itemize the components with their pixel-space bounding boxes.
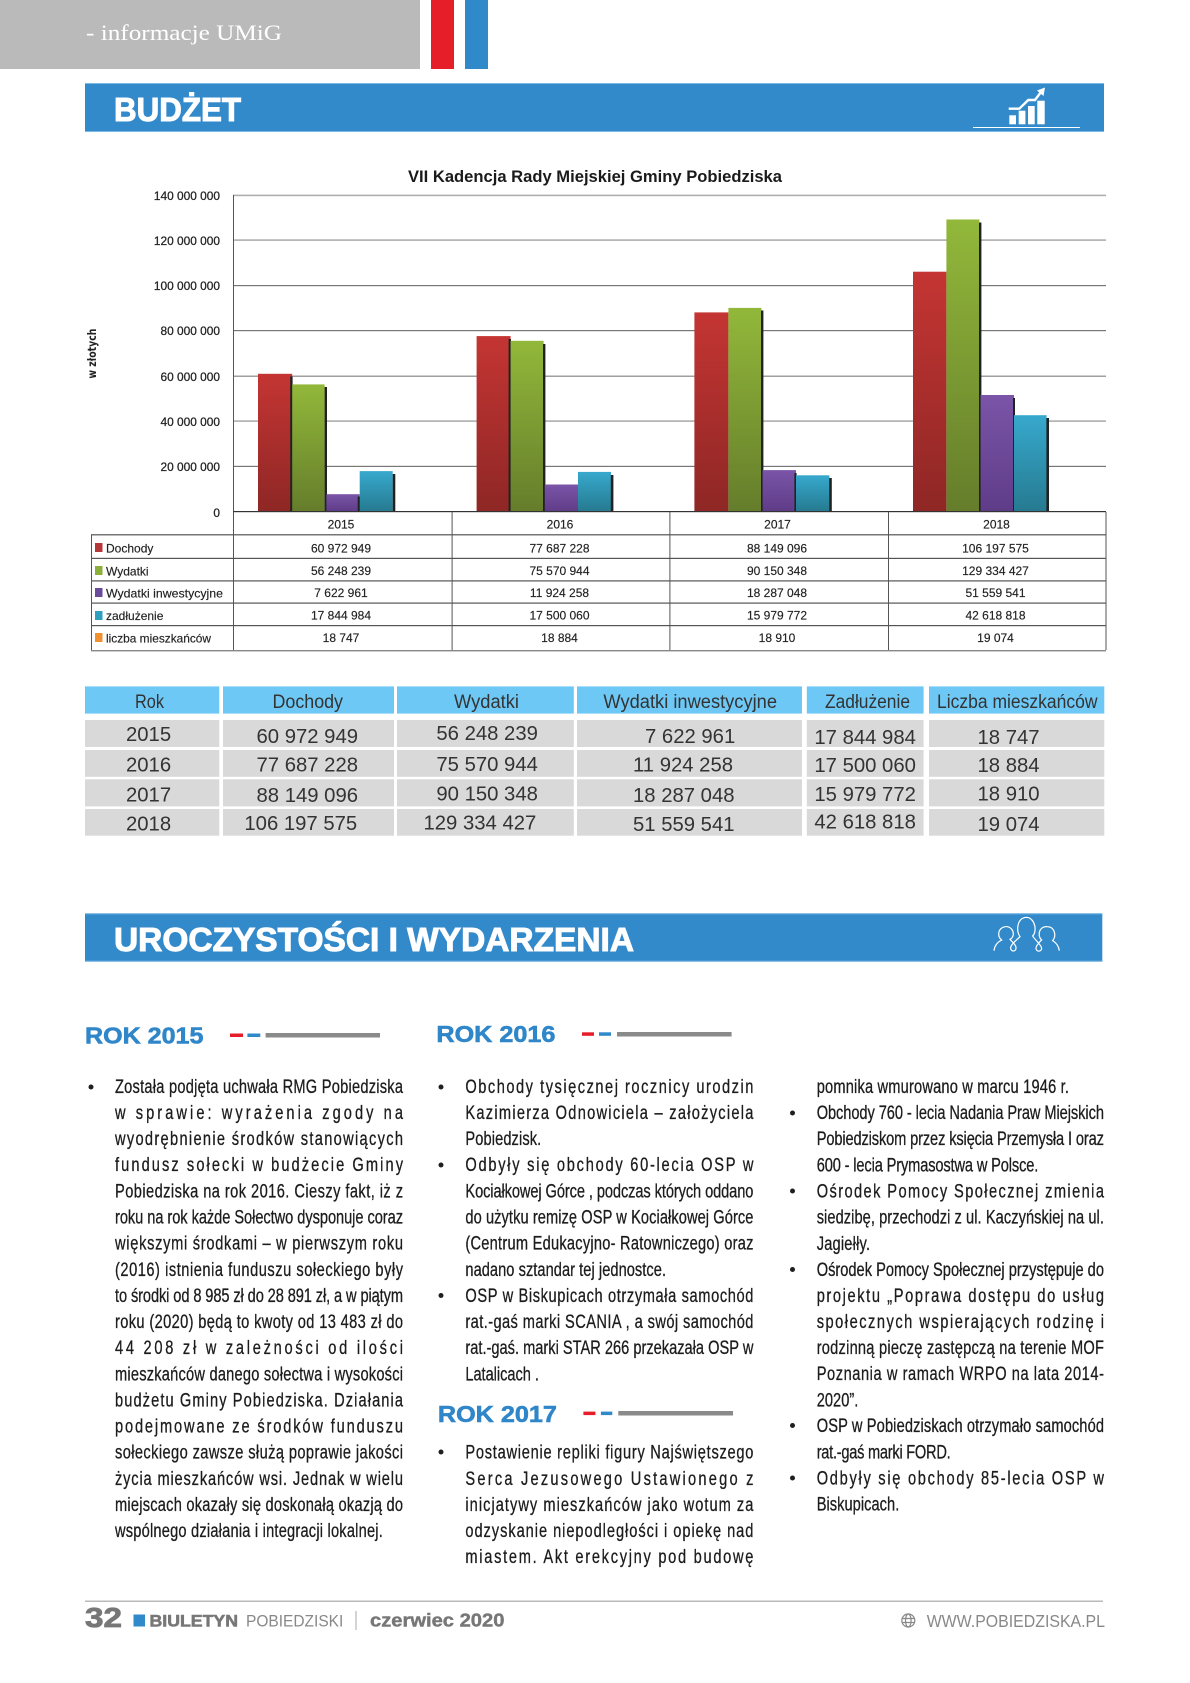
- footer: [85, 1601, 1105, 1633]
- summary table rows: 2015: [126, 724, 171, 746]
- text: rok 2016 bullets: rat.-gaś. marki STAR 266 przekazała OSP w: [465, 1336, 754, 1359]
- chart y-axis labels: 40 000 000: [160, 415, 220, 429]
- icon: rising bar chart: [973, 88, 1080, 128]
- table values: 77 687 228: [529, 542, 590, 556]
- text: rok 2015 bullets: wyodrębnienie środków stanowiących: [114, 1127, 403, 1150]
- heading: rok 2015: ROK 2015: [85, 1023, 203, 1049]
- summary table rows: 15 979 772: [814, 784, 916, 806]
- bar chart: budget 2015-2018: [233, 195, 1106, 512]
- summary table rows: 2016: [126, 754, 171, 776]
- summary table rows: 18 884: [978, 755, 1040, 777]
- table values: [311, 518, 1029, 645]
- text: rok 2016 bullets: Obchody tysięcznej rocznicy urodzin: [465, 1075, 753, 1098]
- page number: 32: [85, 1602, 122, 1633]
- text: rok 2016 bullets: Kazimierza Odnowiciela – założyciela: [465, 1101, 754, 1124]
- table values: 75 570 944: [529, 564, 590, 578]
- table values: 18 910: [759, 631, 796, 645]
- heading: rok 2017: [438, 1401, 733, 1427]
- text: rok 2016 bullets: [438, 1075, 754, 1385]
- website: WWW.POBIEDZISKA.PL: [927, 1611, 1105, 1631]
- chart data table: [91, 512, 1106, 651]
- text: rok 2016 bullets: rat.-gaś marki SCANIA , a swój samochód: [465, 1310, 753, 1333]
- text: rok 2015 bullets: podejmowane ze środków funduszu: [115, 1414, 403, 1437]
- summary table rows: 106 197 575: [244, 813, 357, 835]
- summary table header: Zadłużenie: [825, 692, 910, 713]
- text: rok 2015 bullets: roku na rok każde Sołectwo dysponuje coraz: [115, 1205, 403, 1228]
- text: rok 2017 bullets, column three: rodzinną pieczę zastępczą na terenie MOF: [817, 1336, 1104, 1359]
- table values: 129 334 427: [962, 564, 1029, 578]
- text: rok 2016 bullets: OSP w Biskupicach otrzymała samochód: [465, 1284, 753, 1307]
- text: rok 2017 bullets, column two: Serca Jezusowego Ustawionego z: [465, 1467, 753, 1490]
- text: rok 2017 bullets, column three: Obchody 760 - lecia Nadania Praw Miejskich: [817, 1101, 1104, 1124]
- text: rok 2017 bullets, column three: społecznych wspierających rodzinę i: [817, 1310, 1104, 1333]
- table values: 15 979 772: [747, 608, 807, 622]
- table values: 18 747: [323, 631, 360, 645]
- section banner: uroczystości: [85, 913, 1102, 962]
- chart y-axis labels: 80 000 000: [160, 324, 220, 338]
- summary table rows: 18 910: [978, 784, 1040, 806]
- summary table header: Wydatki inwestycyjne: [603, 692, 777, 713]
- chart y-axis labels: 20 000 000: [160, 460, 220, 474]
- summary table rows: 19 074: [978, 814, 1040, 836]
- summary table rows: 42 618 818: [814, 812, 916, 834]
- summary table header: Dochody: [272, 692, 343, 713]
- icon: globe: [902, 1614, 915, 1627]
- publication name: [134, 1610, 504, 1630]
- text: rok 2015 bullets: budżetu Gminy Pobiedziska. Działania: [115, 1388, 403, 1411]
- header strip: [0, 0, 488, 69]
- table values: 90 150 348: [747, 564, 807, 578]
- header strip: - informacje UMiG: [86, 20, 282, 45]
- table values: 60 972 949: [311, 542, 371, 556]
- text: rok 2016 bullets: Kociałkowej Górce , podczas których oddano: [465, 1179, 753, 1202]
- table values: 2016: [547, 518, 574, 532]
- text: rok 2017 bullets, column three: Ośrodek Pomocy Społecznej zmienia: [817, 1179, 1104, 1202]
- table values: 7 622 961: [314, 586, 368, 600]
- summary table rows: 88 149 096: [256, 785, 358, 807]
- chart title: VII Kadencja Rady Miejskiej Gminy Pobiedziska: [408, 167, 783, 186]
- text: rok 2017 bullets, column three: pomnika wmurowano w marcu 1946 r.: [817, 1075, 1069, 1098]
- table values: 42 618 818: [965, 608, 1026, 622]
- text: rok 2015 bullets: to środki od 8 985 zł do 28 891 zł, a w piątym: [115, 1284, 403, 1307]
- table values: 2017: [764, 518, 791, 532]
- table values: 88 149 096: [747, 542, 807, 556]
- summary table rows: 77 687 228: [256, 754, 358, 776]
- text: rok 2015 bullets: Została podjęta uchwała RMG Pobiedziska: [115, 1075, 403, 1098]
- text: rok 2015 bullets: Pobiedziska na rok 2016. Cieszy fakt, iż z: [115, 1179, 403, 1202]
- table values: 17 844 984: [311, 608, 371, 622]
- icon: group of people: [994, 917, 1059, 951]
- summary table rows: [85, 720, 1104, 836]
- text: rok 2015 bullets: miejscach okazały się doskonałą okazją do: [115, 1493, 403, 1516]
- section banner: uroczystości: UROCZYSTOŚCI I WYDARZENIA: [114, 921, 634, 958]
- summary table rows: 18 747: [978, 727, 1040, 749]
- table values: 2018: [983, 518, 1010, 532]
- table legend: zadłużenie: [106, 609, 164, 623]
- summary table rows: 17 500 060: [814, 755, 916, 777]
- table values: 11 924 258: [530, 586, 589, 600]
- text: rok 2015 bullets: 44 208 zł w zależności od ilości: [115, 1336, 403, 1359]
- text: rok 2017 bullets, column three: 2020”.: [817, 1388, 858, 1411]
- summary table rows: 129 334 427: [424, 812, 536, 834]
- text: rok 2017 bullets, column three: siedzibę, przechodzi z ul. Kaczyńskiej na ul.: [817, 1205, 1104, 1228]
- table values: 106 197 575: [962, 542, 1029, 556]
- summary table header: Liczba mieszkańców: [937, 692, 1098, 713]
- text: rok 2017 bullets, column two: Postawienie repliki figury Najświętszego: [465, 1440, 753, 1463]
- chart y-axis labels: 100 000 000: [154, 279, 220, 293]
- publication name: BIULETYN: [150, 1612, 238, 1630]
- chart y-axis labels: 0: [213, 506, 220, 520]
- text: rok 2015 bullets: większymi środkami – w pierwszym roku: [114, 1231, 403, 1254]
- text: rok 2016 bullets: Latalicach .: [465, 1362, 539, 1385]
- text: rok 2017 bullets, column three: 600 - lecia Prymasostwa w Polsce.: [817, 1153, 1038, 1176]
- text: rok 2017 bullets, column two: inicjatywy mieszkańców jako wotum za: [465, 1493, 754, 1516]
- bars 2018: [913, 220, 1049, 511]
- text: rok 2015 bullets: [88, 1075, 403, 1542]
- text: rok 2017 bullets, column three: [790, 1075, 1104, 1515]
- section banner: budżet: BUDŻET: [114, 91, 241, 128]
- summary table rows: 56 248 239: [436, 723, 538, 745]
- text: rok 2015 bullets: (2016) istnienia funduszu sołeckiego były: [115, 1258, 403, 1281]
- summary table rows: 90 150 348: [436, 784, 538, 806]
- text: rok 2017 bullets, column three: Poznania w ramach WRPO na lata 2014-: [817, 1362, 1104, 1385]
- summary table rows: 2018: [126, 814, 171, 836]
- text: rok 2016 bullets: do użytku remizę OSP w Kociałkowej Górce: [465, 1205, 753, 1228]
- heading: rok 2016: ROK 2016: [436, 1021, 555, 1047]
- text: rok 2015 bullets: w sprawie: wyrażenia zgody na: [114, 1101, 403, 1124]
- summary table rows: 2017: [126, 784, 171, 806]
- text: rok 2015 bullets: życia mieszkańców wsi. Jednak w wielu: [115, 1467, 403, 1490]
- table legend: Dochody: [106, 542, 153, 556]
- text: rok 2015 bullets: wspólnego działania i integracji lokalnej.: [114, 1519, 383, 1542]
- text: rok 2016 bullets: Odbyły się obchody 60-lecia OSP w: [465, 1153, 754, 1176]
- table values: 2015: [328, 518, 355, 532]
- text: rok 2015 bullets: roku (2020) będą to kwoty od 13 483 zł do: [115, 1310, 403, 1333]
- text: rok 2017 bullets, column three: projektu „Poprawa dostępu do usług: [817, 1284, 1104, 1307]
- text: rok 2017 bullets, column three: rat.-gaś marki FORD.: [817, 1440, 951, 1463]
- table values: 19 074: [977, 631, 1014, 645]
- axis title: w złotych: [85, 329, 99, 379]
- text: rok 2017 bullets, column two: odzyskanie niepodległości i opiekę nad: [465, 1519, 753, 1542]
- summary table rows: 17 844 984: [814, 727, 916, 749]
- text: rok 2015 bullets: sołeckiego zawsze służą poprawie jakości: [115, 1440, 403, 1463]
- chart y-axis labels: 120 000 000: [154, 234, 220, 248]
- summary table rows: 51 559 541: [633, 814, 735, 836]
- table values: 56 248 239: [311, 564, 371, 578]
- summary table rows: 75 570 944: [436, 754, 538, 776]
- summary table rows: 7 622 961: [645, 726, 735, 748]
- text: rok 2017 bullets, column two: miastem. Akt erekcyjny pod budowę: [465, 1545, 753, 1568]
- table legend: Wydatki inwestycyjne: [106, 586, 223, 600]
- summary table rows: 18 287 048: [633, 785, 735, 807]
- text: rok 2017 bullets, column three: Pobiedziskom przez księcia Przemysła I oraz: [817, 1127, 1104, 1150]
- summary table rows: 11 924 258: [633, 754, 733, 776]
- text: rok 2017 bullets, column three: Biskupicach.: [817, 1492, 899, 1515]
- table values: 18 884: [541, 631, 578, 645]
- summary table header: Rok: [135, 692, 164, 713]
- text: rok 2015 bullets: fundusz sołecki w budżecie Gminy: [115, 1153, 403, 1176]
- chart y-axis labels: [154, 189, 220, 520]
- text: rok 2016 bullets: (Centrum Edukacyjno- Ratowniczego) oraz: [465, 1231, 753, 1254]
- text: rok 2015 bullets: mieszkańców danego sołectwa i wysokości: [115, 1362, 403, 1385]
- table values: 51 559 541: [965, 586, 1026, 600]
- summary table: [85, 686, 1104, 836]
- heading: rok 2015: [85, 1023, 380, 1049]
- summary table header: Wydatki: [454, 692, 519, 713]
- text: rok 2016 bullets: Pobiedzisk.: [465, 1127, 541, 1150]
- text: rok 2017 bullets, column three: Odbyły się obchody 85-lecia OSP w: [817, 1466, 1104, 1489]
- heading: rok 2017: ROK 2017: [438, 1401, 557, 1427]
- bars 2015: [258, 374, 395, 511]
- table values: 18 287 048: [747, 586, 807, 600]
- chart y-axis labels: 60 000 000: [160, 370, 220, 384]
- summary table rows: 60 972 949: [256, 726, 358, 748]
- table values: 17 500 060: [529, 608, 590, 622]
- text: rok 2017 bullets, column three: Ośrodek Pomocy Społecznej przystępuje do: [817, 1258, 1104, 1281]
- table legend: [95, 542, 223, 646]
- heading: rok 2016: [436, 1021, 732, 1047]
- chart y-axis labels: 140 000 000: [154, 189, 220, 203]
- publication name: czerwiec 2020: [370, 1610, 504, 1630]
- text: rok 2016 bullets: nadano sztandar tej jednostce.: [465, 1258, 666, 1281]
- bars 2017: [694, 308, 832, 511]
- text: rok 2017 bullets, column three: Jagiełły.: [817, 1232, 870, 1255]
- text: rok 2017 bullets, column three: OSP w Pobiedziskach otrzymało samochód: [817, 1414, 1104, 1437]
- table legend: Wydatki: [106, 564, 149, 578]
- table legend: liczba mieszkańców: [106, 632, 211, 646]
- summary table header: [85, 686, 1104, 714]
- bars 2016: [477, 336, 613, 511]
- section banner: budżet: [85, 83, 1104, 132]
- text: rok 2017 bullets, column two: [438, 1440, 754, 1568]
- publication name: POBIEDZISKI: [246, 1612, 343, 1630]
